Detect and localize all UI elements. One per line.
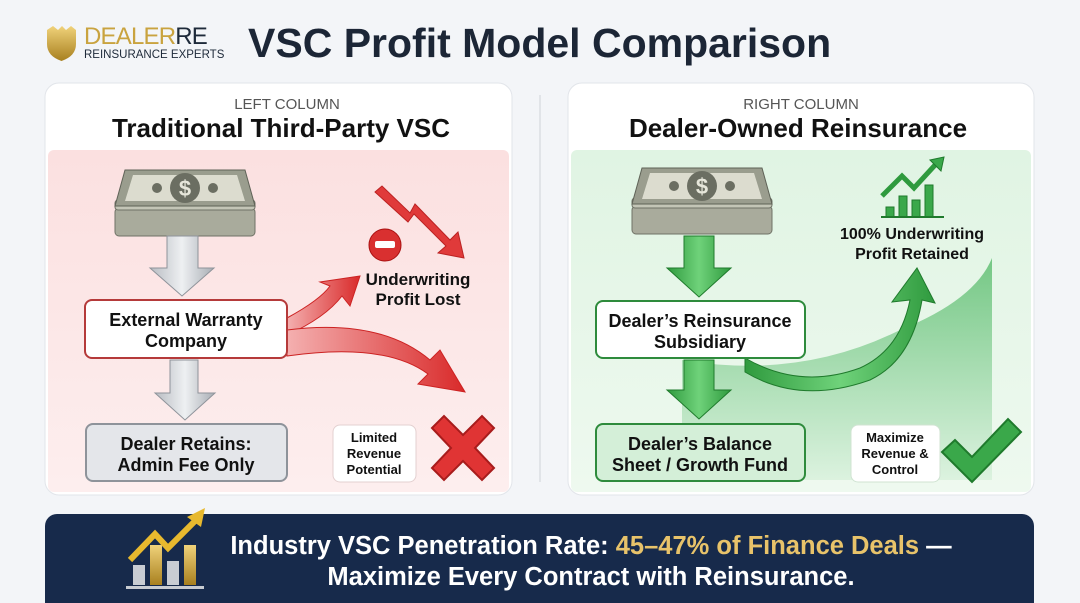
arrow: green curved up	[745, 268, 935, 391]
arrow: green down 2	[667, 360, 731, 419]
icon: red X	[432, 416, 494, 480]
arrow: red big curved	[287, 327, 465, 392]
column label: RIGHT COLUMN	[743, 96, 859, 113]
callout: maximize revenue: Control	[872, 462, 918, 477]
panel: traditional third-party VSC	[45, 83, 512, 495]
icon: money stack	[632, 168, 772, 234]
icon: growth chart	[881, 157, 944, 217]
box: balance sheet: Sheet / Growth Fund	[612, 455, 788, 475]
callout: maximize revenue: Maximize	[866, 430, 924, 445]
panel: dealer-owned reinsurance	[568, 83, 1034, 495]
box: dealer retains: Admin Fee Only	[117, 455, 255, 475]
box: dealer's reinsurance subsidiary: Subsidiary	[654, 332, 746, 352]
box: dealer retains: Dealer Retains:	[120, 434, 252, 454]
label: underwriting profit lost: Underwriting	[366, 270, 470, 289]
box: external warranty company: Company	[145, 331, 227, 351]
banner: penetration rate	[45, 508, 1034, 603]
panel: dealer-owned reinsurance: Profit Retained	[855, 246, 969, 263]
box: dealer's reinsurance subsidiary: Dealer’s Reinsurance	[608, 311, 792, 331]
callout: limited revenue: Potential	[347, 462, 401, 477]
icon: check mark	[942, 419, 1021, 482]
box: dealer retains	[86, 424, 287, 481]
callout: limited revenue	[333, 425, 416, 482]
callout: limited revenue: Limited	[351, 430, 397, 445]
column label: LEFT COLUMN	[234, 96, 340, 113]
icon: money stack	[115, 170, 255, 236]
title: VSC Profit Model Comparison	[248, 20, 831, 66]
label: 100% underwriting profit retained: 100% Underwriting	[840, 226, 984, 243]
column heading: Dealer-Owned Reinsurance	[629, 113, 967, 143]
box: external warranty company	[85, 300, 287, 358]
green area fill	[682, 258, 992, 480]
arrow: grey down 1	[150, 236, 214, 296]
icon: minus circle	[369, 229, 401, 261]
box: balance sheet: Dealer’s Balance	[628, 434, 772, 454]
arrow: grey down 2	[155, 360, 215, 420]
box: dealer's reinsurance subsidiary	[596, 301, 805, 358]
box: external warranty company: External Warranty	[109, 310, 263, 330]
arrow: green down 1	[667, 236, 731, 297]
icon: gold chart	[126, 508, 205, 589]
arrow: red up to profit lost	[287, 276, 360, 335]
callout: limited revenue: Revenue	[347, 446, 401, 461]
box: balance sheet	[596, 424, 805, 481]
banner: penetration rate: Maximize Every Contract with Reinsurance.	[327, 563, 855, 591]
panel: traditional third-party VSC: Profit Lost	[376, 290, 461, 309]
callout: maximize revenue: Revenue &	[861, 446, 929, 461]
logo: DEALERRE	[84, 23, 207, 50]
banner text: Industry VSC Penetration Rate: 45–47% of Finance Deals —	[230, 532, 952, 560]
logo: REINSURANCE EXPERTS	[84, 49, 225, 61]
callout: maximize revenue	[851, 425, 940, 482]
divider	[539, 95, 541, 482]
column heading: Traditional Third-Party VSC	[112, 113, 450, 143]
arrow: zigzag down	[375, 186, 464, 258]
logo	[47, 23, 225, 61]
